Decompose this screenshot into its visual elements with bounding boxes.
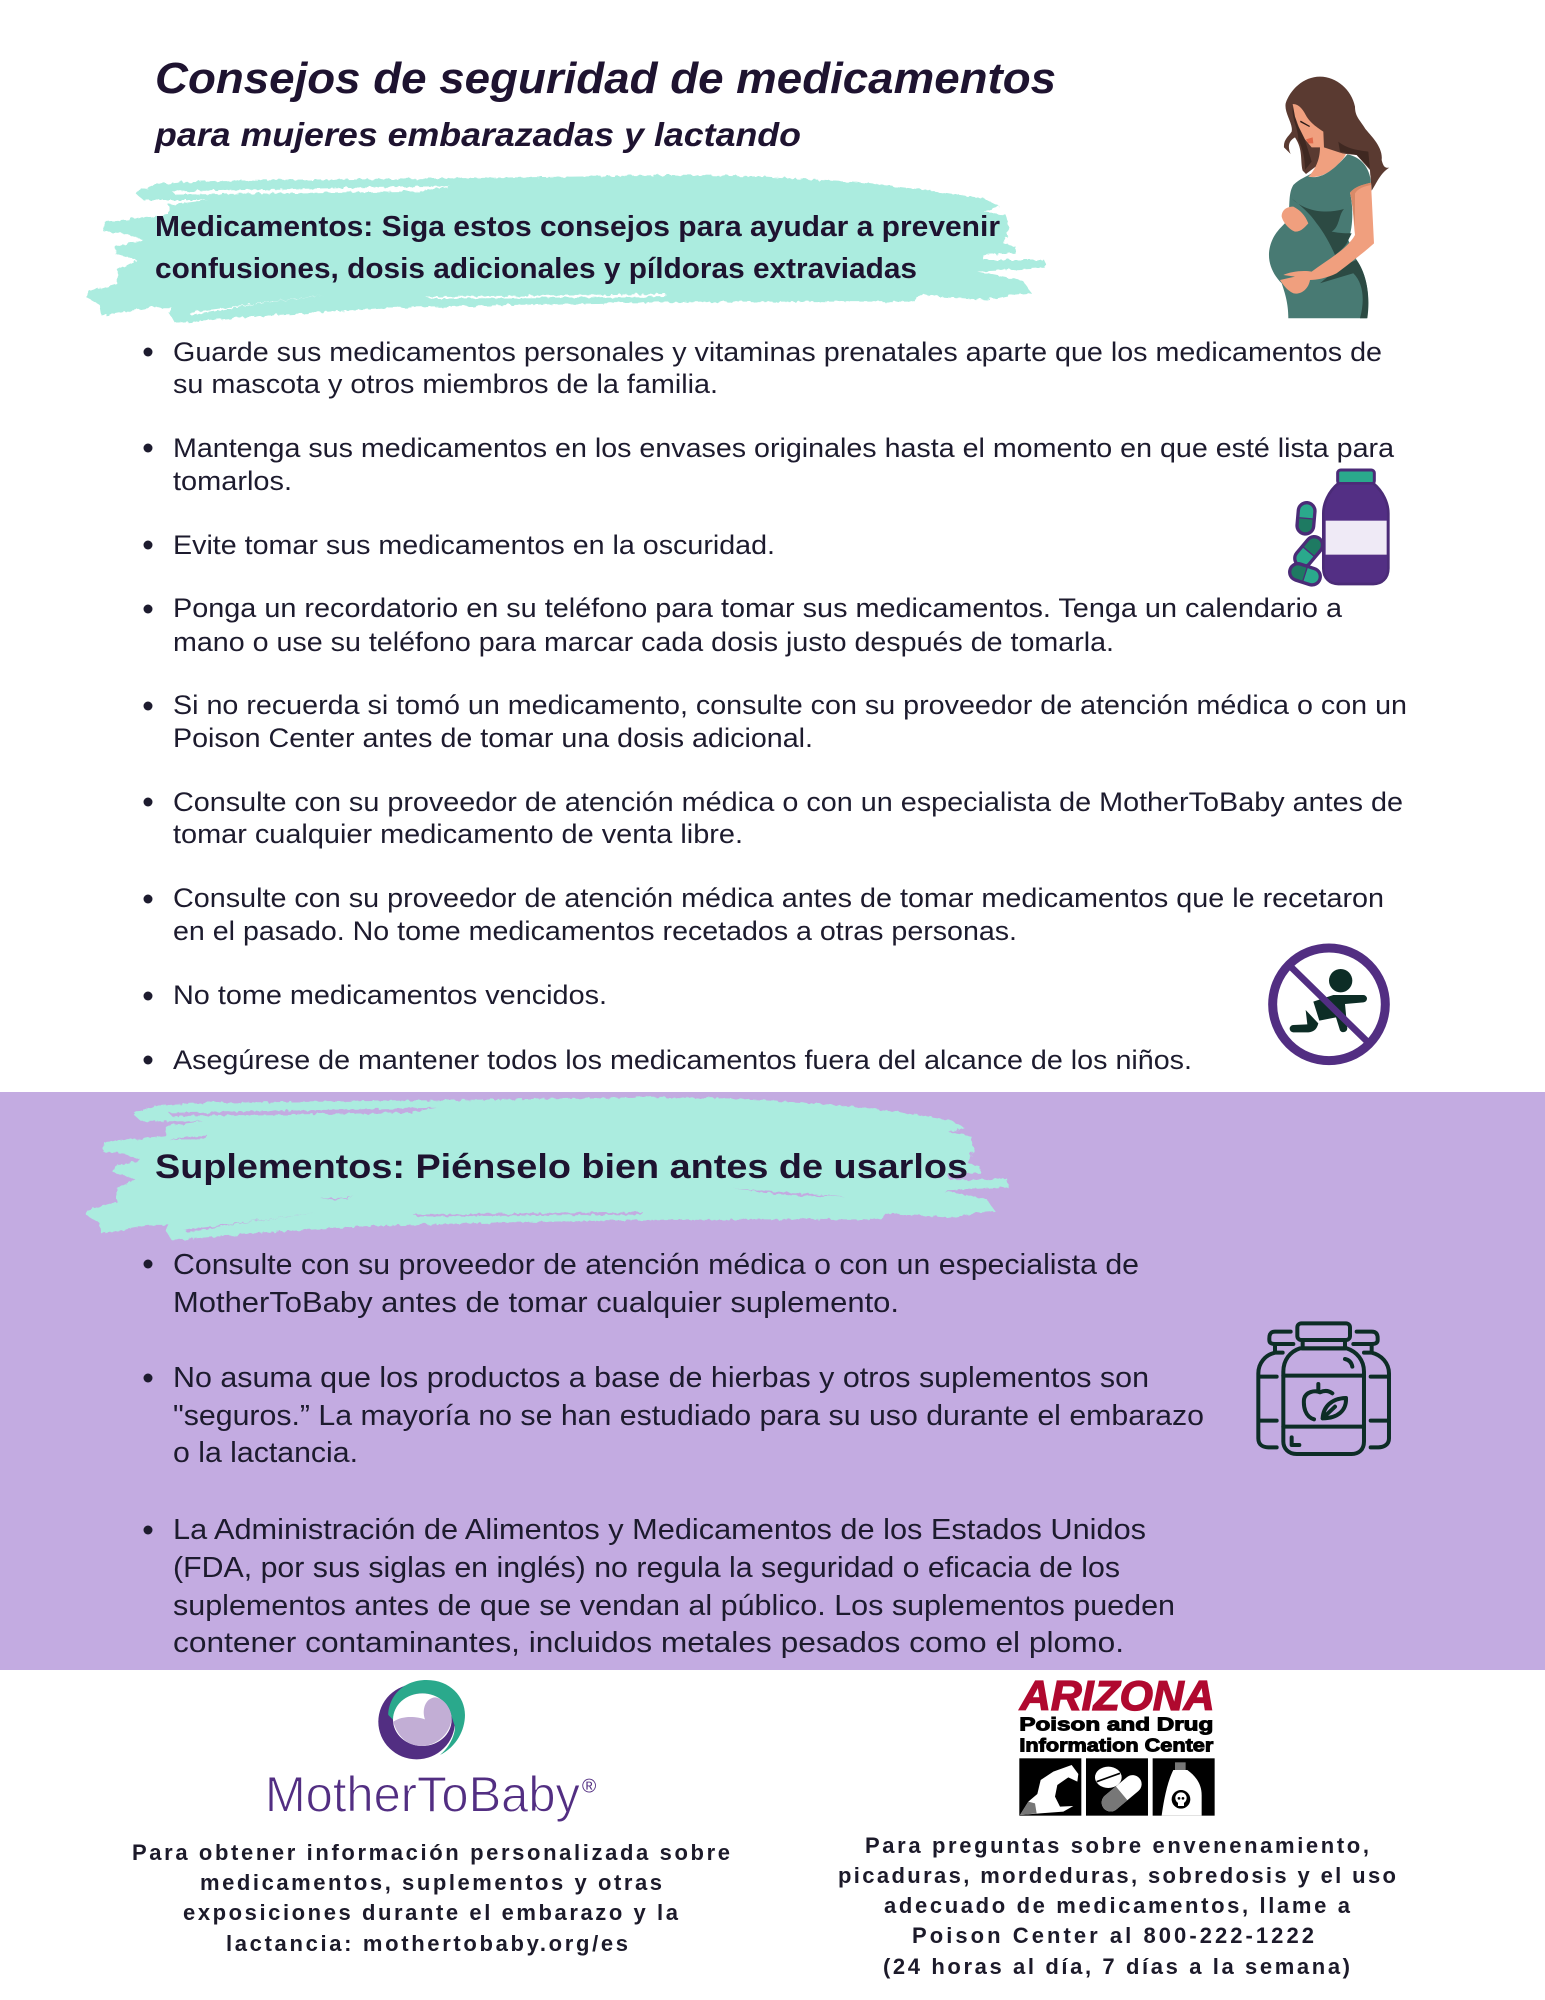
heading: medications: confusiones, dosis adicionales y píldoras extraviadas (155, 253, 917, 285)
text block: MotherToBaby contact: exposiciones durante el embarazo y la (183, 1900, 679, 1925)
tip text: Guarde sus medicamentos personales y vitaminas prenatales aparte que los medicamentos de (173, 337, 1382, 367)
bullet list: supplement tips (144, 1249, 1204, 1659)
tip text: suplementos antes de que se vendan al público. Los suplementos pueden (173, 1590, 1175, 1622)
tip text: Consulte con su proveedor de atención médica antes de tomar medicamentos que le recetaron (173, 883, 1384, 913)
tip text: contener contaminantes, incluidos metales pesados como el plomo. (173, 1627, 1124, 1659)
heading: supplements: Suplementos: Piénselo bien antes de usarlos (155, 1148, 968, 1186)
tip text (173, 337, 1407, 1075)
text block: MotherToBaby contact: medicamentos, suplementos y otras (200, 1870, 662, 1895)
brush highlight: supplements heading (86, 1097, 1008, 1240)
text block: Poison Center contact: picaduras, mordeduras, sobredosis y el uso (838, 1863, 1396, 1888)
logo: Arizona Poison and Drug Information Center (1019, 1673, 1215, 1816)
tip text: Consulte con su proveedor de atención médica o con un especialista de (173, 1249, 1139, 1281)
bullet list: medication tips (144, 337, 1407, 1075)
text block: Poison Center contact: (24 horas al día, 7 días a la semana) (883, 1954, 1350, 1979)
tip text: Evite tomar sus medicamentos en la oscuridad. (173, 530, 775, 560)
text block: Poison Center contact: Para preguntas sobre envenenamiento, (865, 1833, 1369, 1858)
tip text: Poison Center antes de tomar una dosis adicional. (173, 723, 813, 753)
tip text: Consulte con su proveedor de atención médica o con un especialista de MotherToBaby antes de (173, 787, 1403, 817)
tip text: mano o use su teléfono para marcar cada dosis justo después de tomarla. (173, 627, 1114, 657)
tip text: en el pasado. No tome medicamentos recetados a otras personas. (173, 916, 1017, 946)
tip text: Mantenga sus medicamentos en los envases originales hasta el momento en que esté lista para (173, 433, 1395, 463)
icon: supplement jars (1258, 1323, 1389, 1454)
logo: MotherToBaby (265, 1680, 596, 1823)
heading: medications: Medicamentos: Siga estos consejos para ayudar a prevenir (155, 211, 1000, 243)
tip text: o la lactancia. (173, 1437, 358, 1469)
logo: MotherToBaby: MotherToBaby (265, 1767, 580, 1823)
text block: MotherToBaby contact: lactancia: mothertobaby.org/es (226, 1931, 628, 1956)
icon: pill bottle (1285, 470, 1388, 589)
tip text: "seguros.” La mayoría no se han estudiado para su uso durante el embarazo (173, 1400, 1204, 1432)
tip text: La Administración de Alimentos y Medicamentos de los Estados Unidos (173, 1514, 1146, 1546)
tip text: No asuma que los productos a base de hierbas y otros suplementos son (173, 1362, 1149, 1394)
heading: medications (155, 211, 1000, 285)
tip text (173, 1249, 1204, 1659)
tip text: (FDA, por sus siglas en inglés) no regula la seguridad o eficacia de los (173, 1552, 1120, 1584)
bullet markers (144, 1260, 152, 1534)
brush highlight: medications heading (86, 175, 1045, 323)
logo: Arizona Poison and Drug Information Center: ARIZONA (1019, 1673, 1215, 1719)
tip text: tomarlos. (173, 466, 292, 496)
subtitle: para mujeres embarazadas y lactando (154, 116, 801, 153)
text block: Poison Center contact: adecuado de medicamentos, llame a (884, 1893, 1351, 1918)
logo: Arizona Poison and Drug Information Center: Information Center (1019, 1735, 1213, 1756)
tip text: Asegúrese de mantener todos los medicamentos fuera del alcance de los niños. (173, 1045, 1192, 1075)
text block: MotherToBaby contact: Para obtener información personalizada sobre (132, 1840, 730, 1865)
text block: MotherToBaby contact (132, 1840, 730, 1956)
icon: pregnant woman (1269, 77, 1389, 318)
text block: Poison Center contact (838, 1833, 1396, 1979)
tip text: Si no recuerda si tomó un medicamento, consulte con su proveedor de atención médica o con un (173, 690, 1407, 720)
icon: keep away from children (1273, 948, 1385, 1061)
tip text: No tome medicamentos vencidos. (173, 980, 607, 1010)
logo: Arizona Poison and Drug Information Center: Poison and Drug (1019, 1714, 1213, 1735)
panel: supplements background (0, 1092, 1545, 1670)
tip text: MotherToBaby antes de tomar cualquier suplemento. (173, 1287, 899, 1319)
tip text: Ponga un recordatorio en su teléfono para tomar sus medicamentos. Tenga un calendario a (173, 593, 1343, 623)
title: Consejos de seguridad de medicamentos (155, 54, 1056, 103)
tip text: tomar cualquier medicamento de venta libre. (173, 819, 743, 849)
bullet markers (144, 348, 152, 1064)
text block: Poison Center contact: Poison Center al 800-222-1222 (912, 1923, 1314, 1948)
logo: MotherToBaby: ® (582, 1777, 596, 1798)
tip text: su mascota y otros miembros de la familia. (173, 369, 718, 399)
